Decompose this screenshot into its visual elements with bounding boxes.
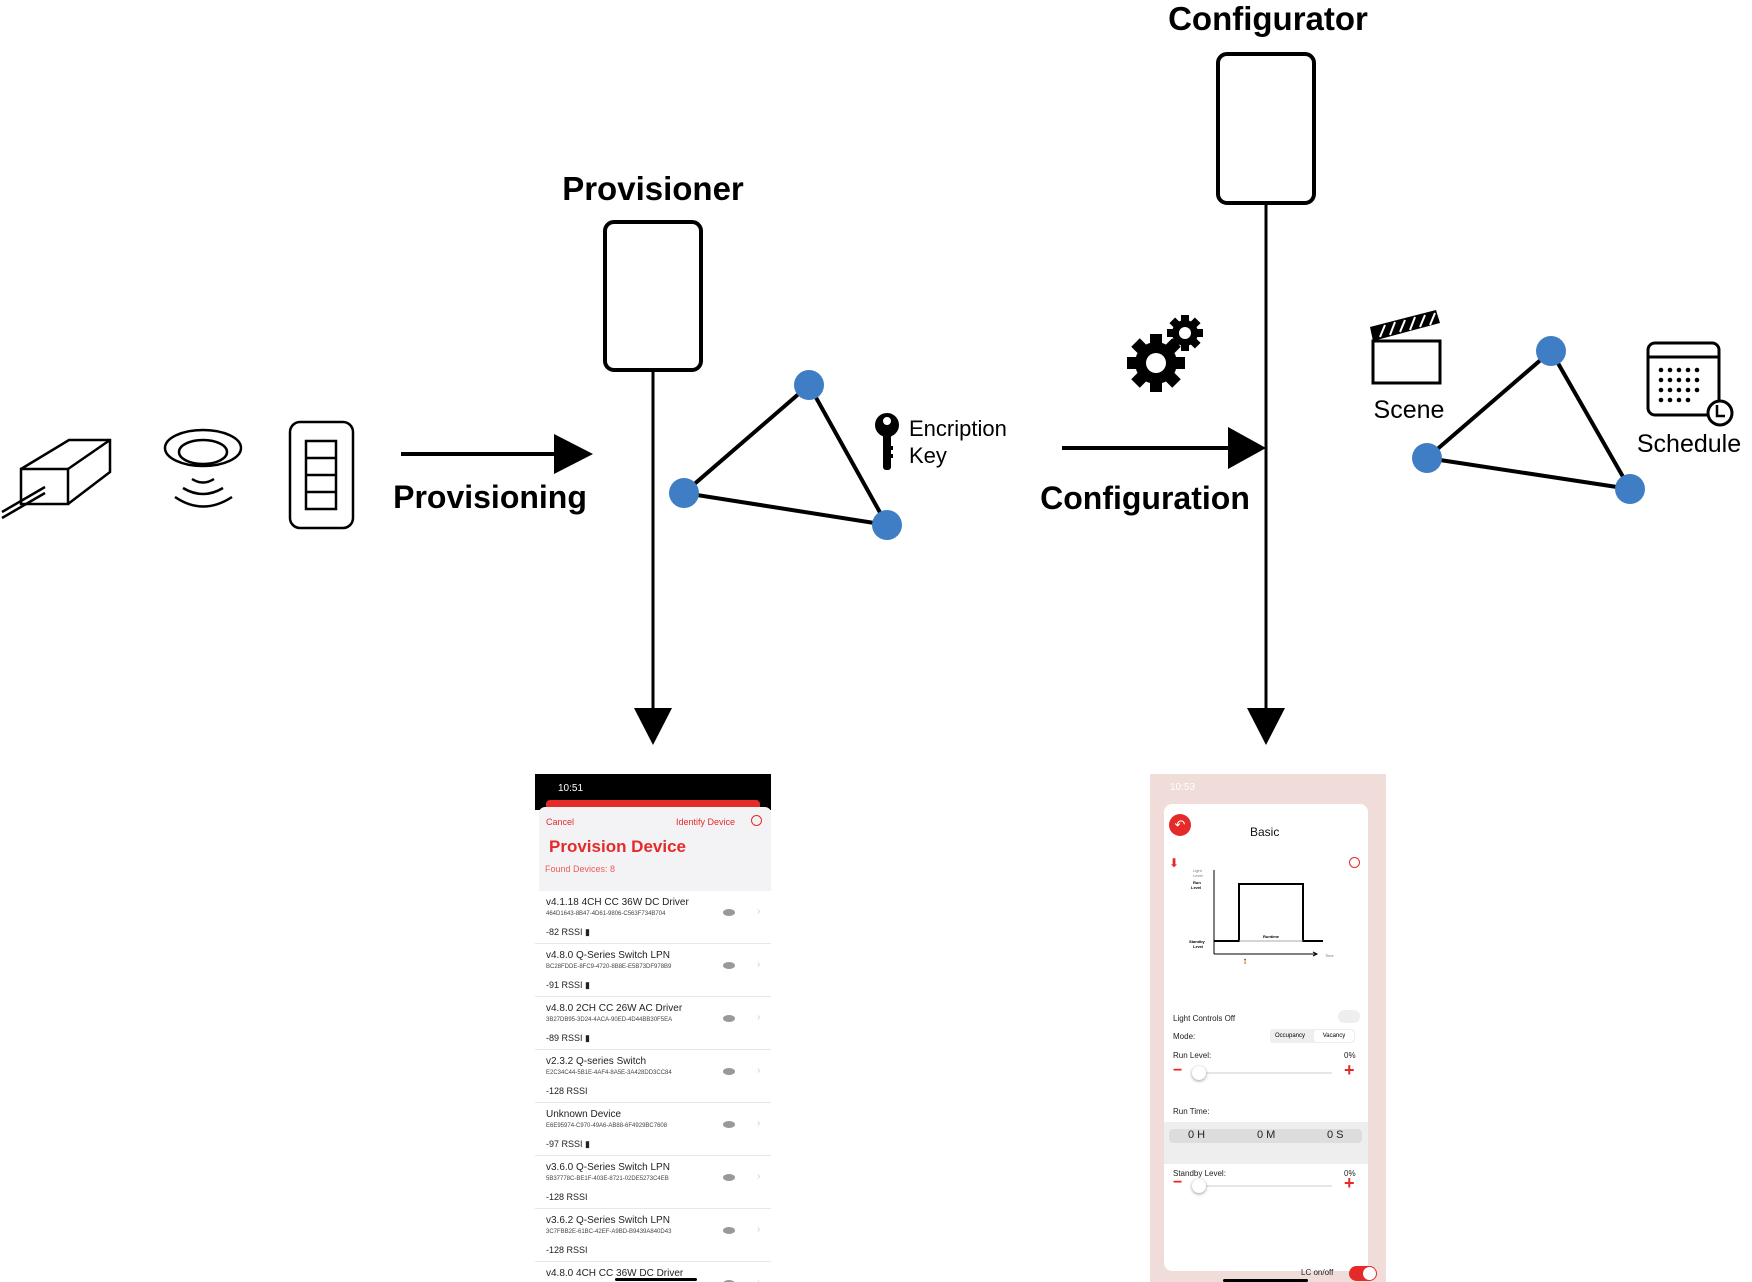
screenshot: basic configuration: [1150, 774, 1386, 1282]
title: Provisioner: Provisioner: [562, 170, 744, 207]
device list: ›: [757, 959, 760, 970]
device list: -128 RSSI: [546, 1245, 588, 1255]
icon: key: [875, 413, 899, 470]
label: Schedule: Schedule: [1637, 430, 1741, 458]
device list: -128 RSSI: [546, 1086, 588, 1096]
settings card: [1164, 804, 1368, 1271]
icon: switch: [290, 422, 353, 528]
device list: -97 RSSI ▮: [546, 1139, 590, 1149]
chart: Light: [1193, 868, 1203, 873]
device list: v3.6.0 Q-Series Switch LPN: [546, 1162, 670, 1173]
device list: Unknown Device: [546, 1109, 621, 1120]
device list: ›: [757, 1012, 760, 1023]
diagram: [1, 0, 1741, 745]
screenshot: basic configuration: LC on/off: [1301, 1268, 1333, 1277]
screenshot: provision device: 10:51: [558, 783, 583, 794]
header: Identify Device: [676, 817, 735, 827]
device list: E2C34C44-5B1E-4AF4-8A5E-3A428DD3CC84: [546, 1070, 672, 1076]
device list: v4.8.0 Q-Series Switch LPN: [546, 950, 670, 961]
label: Configuration: Configuration: [1040, 480, 1250, 516]
settings card: ⬇: [1169, 856, 1179, 870]
mesh network 1: [669, 370, 902, 540]
settings card: Light Controls Off: [1173, 1014, 1235, 1023]
device list: v4.8.0 2CH CC 26W AC Driver: [546, 1003, 682, 1014]
label: Scene: Scene: [1374, 396, 1444, 424]
settings card: +: [1344, 1060, 1355, 1080]
settings card: Standby Level:: [1173, 1169, 1226, 1178]
configurator device: [1218, 54, 1314, 745]
device list: 3B27DB95-3D24-4ACA-90ED-4D44BB30F5EA: [546, 1017, 672, 1023]
icon: driver box: [2, 440, 110, 518]
device list: ›: [757, 906, 760, 917]
device list: v4.1.18 4CH CC 36W DC Driver: [546, 897, 689, 908]
label: Encription Key: Key: [909, 443, 947, 468]
device list: -89 RSSI ▮: [546, 1033, 590, 1043]
device list: -128 RSSI: [546, 1192, 588, 1202]
icon: calendar: [1648, 343, 1732, 425]
chart: Runtime: [1263, 934, 1280, 939]
device list: BC28FDDE-8FC9-4720-8B8E-E5B73DF978B9: [546, 964, 671, 970]
chart: [1189, 868, 1335, 964]
label: Provisioning: Provisioning: [393, 479, 587, 515]
chart: Level: [1191, 885, 1201, 890]
settings card: +: [1344, 1173, 1355, 1193]
settings card: 0 H: [1188, 1129, 1205, 1141]
header: [539, 807, 771, 891]
device list: ›: [757, 1224, 760, 1235]
settings card: 0 S: [1327, 1129, 1344, 1141]
device list: [535, 897, 771, 1282]
settings card: 0%: [1344, 1051, 1356, 1060]
device list: v4.8.0 4CH CC 36W DC Driver: [546, 1268, 683, 1279]
device list: -91 RSSI ▮: [546, 980, 590, 990]
device list: v2.3.2 Q-series Switch: [546, 1056, 646, 1067]
chart: Level: [1193, 873, 1203, 878]
arrow: provisioning: [401, 434, 593, 474]
screenshot: provision device: [535, 774, 771, 1282]
icon: sensor: [165, 430, 241, 506]
settings card: Occupancy: [1275, 1033, 1305, 1039]
mesh network 2: [1412, 336, 1645, 504]
header: Found Devices: 8: [545, 864, 615, 874]
device list: ›: [757, 1118, 760, 1129]
settings card: Run Time:: [1173, 1107, 1209, 1116]
icon: scene clapper: [1370, 310, 1440, 383]
settings card: Mode:: [1173, 1032, 1195, 1041]
device list: 3C7FBB2E-61BC-42EF-A9BD-B9439A840D43: [546, 1229, 671, 1235]
icon: gears: [1127, 315, 1203, 392]
provisioner device: [605, 222, 701, 745]
title: Configurator: Configurator: [1168, 0, 1368, 37]
settings card: −: [1173, 1062, 1182, 1079]
device list: ›: [757, 1065, 760, 1076]
device list: ›: [757, 1171, 760, 1182]
chart: Standby: [1189, 939, 1206, 944]
header: Cancel: [546, 817, 574, 827]
device list: -82 RSSI ▮: [546, 927, 590, 937]
label: Encription Key: Encription: [909, 416, 1007, 441]
settings card: −: [1173, 1174, 1182, 1191]
screenshot: basic configuration: 10:53: [1170, 782, 1195, 793]
settings card: 0 M: [1257, 1129, 1275, 1141]
device list: 5B37778C-BE1F-403E-8721-02DE5273C4EB: [546, 1176, 669, 1182]
chart: Level: [1193, 944, 1203, 949]
settings card: Run Level:: [1173, 1051, 1211, 1060]
settings card: ↶: [1175, 817, 1185, 832]
device list: v3.6.2 Q-Series Switch LPN: [546, 1215, 670, 1226]
settings card: Vacancy: [1323, 1033, 1345, 1039]
device list: 464D1643-8B47-4D61-9806-C563F734B704: [546, 911, 665, 917]
chart: Time: [1325, 953, 1335, 958]
settings card: Basic: [1250, 825, 1279, 839]
device list: E6E95974-C970-49A6-AB88-6F4929BC7608: [546, 1123, 667, 1129]
settings card: 0%: [1344, 1169, 1356, 1178]
arrow: configuration: [1062, 427, 1266, 469]
header: Provision Device: [549, 837, 686, 856]
chart: Run: [1193, 880, 1201, 885]
